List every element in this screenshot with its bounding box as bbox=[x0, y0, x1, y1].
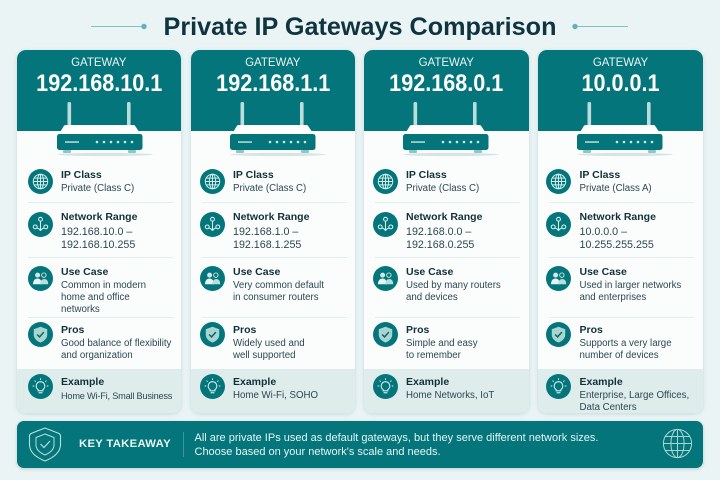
use case text bbox=[580, 280, 681, 303]
header: gateway 192.168.0.1: 192.168.0.1 bbox=[389, 70, 503, 97]
network range heading: Network Range bbox=[406, 210, 482, 222]
IP class value: Private (Class C) bbox=[61, 182, 134, 194]
network range value bbox=[233, 226, 301, 251]
network range value bbox=[580, 226, 654, 251]
pros text: and organization bbox=[61, 350, 133, 361]
icon: shield bbox=[28, 322, 53, 347]
header: gateway 192.168.0.1: GATEWAY bbox=[419, 57, 474, 69]
pros text: Supports a very large bbox=[580, 338, 672, 349]
icon: users bbox=[546, 266, 571, 291]
header: gateway 192.168.1.1: GATEWAY bbox=[245, 57, 300, 69]
icon: users bbox=[373, 266, 398, 291]
router icon bbox=[230, 102, 326, 156]
network range value: 192.168.10.0 – bbox=[61, 226, 132, 238]
IP class value: Private (Class C) bbox=[233, 182, 306, 194]
pros heading: Pros bbox=[233, 324, 256, 336]
example heading: Example bbox=[61, 376, 104, 388]
network range value: 10.255.255.255 bbox=[580, 239, 654, 251]
example band bbox=[190, 369, 355, 413]
example text: Home Networks, IoT bbox=[406, 390, 494, 401]
pros text: Widely used and bbox=[233, 338, 305, 349]
example heading: Example bbox=[406, 376, 449, 388]
pros heading: Pros bbox=[61, 324, 84, 336]
pros text: to remember bbox=[406, 350, 461, 361]
use case text bbox=[61, 280, 146, 315]
example band bbox=[16, 369, 181, 413]
use case text: home and office bbox=[61, 292, 130, 303]
takeaway text: All are private IPs used as default gateways, but they serve different network sizes. bbox=[194, 432, 598, 444]
pros text: number of devices bbox=[580, 350, 659, 361]
example text: Enterprise, Large Offices, bbox=[580, 390, 689, 401]
use case text: Used in larger networks bbox=[580, 280, 681, 290]
icon: network bbox=[546, 212, 571, 237]
use case heading: Use Case bbox=[406, 266, 453, 278]
router icon bbox=[57, 102, 152, 156]
use case text: Very common default bbox=[233, 280, 324, 290]
pros text: well supported bbox=[233, 350, 295, 361]
divider bbox=[182, 432, 184, 457]
panel: gateway 192.168.10.1 bbox=[16, 50, 181, 413]
IP class heading: IP Class bbox=[406, 169, 447, 181]
pros heading: Pros bbox=[580, 324, 603, 336]
panel: gateway 192.168.0.1 bbox=[364, 50, 528, 413]
icon: shield outline bbox=[28, 427, 62, 462]
takeaway text: Choose based on your network's scale and needs. bbox=[194, 446, 441, 458]
icon: network bbox=[200, 212, 225, 237]
icon: shield bbox=[373, 322, 398, 347]
example text: Home Wi-Fi, SOHO bbox=[233, 390, 318, 401]
icon: bulb bbox=[200, 374, 225, 399]
icon: globe outline bbox=[662, 428, 692, 459]
pros text: Simple and easy bbox=[406, 338, 478, 349]
use case heading: Use Case bbox=[580, 266, 627, 278]
pros text bbox=[233, 338, 305, 361]
use case text: in consumer routers bbox=[233, 292, 319, 303]
use case text: Common in modern bbox=[61, 280, 146, 290]
left title ornament bbox=[91, 24, 147, 30]
panel: key takeaway bbox=[16, 421, 703, 468]
title: Private IP Gateways Comparison bbox=[164, 13, 556, 41]
key takeaway label: KEY TAKEAWAY bbox=[79, 438, 171, 450]
use case text: Used by many routers bbox=[406, 280, 501, 290]
use case text: networks bbox=[61, 304, 100, 315]
header: gateway 10.0.0.1: 10.0.0.1 bbox=[581, 70, 660, 97]
network range value bbox=[61, 226, 135, 251]
takeaway text bbox=[194, 430, 598, 460]
use case heading: Use Case bbox=[61, 266, 108, 278]
header: gateway 192.168.1.1 bbox=[190, 50, 355, 131]
network range value: 192.168.1.0 – bbox=[233, 226, 298, 238]
IP class value: Private (Class C) bbox=[406, 182, 479, 194]
icon: bulb bbox=[373, 374, 398, 399]
use case text: and devices bbox=[406, 292, 458, 303]
pros text: Good balance of flexibility bbox=[61, 338, 171, 349]
use case text bbox=[233, 280, 324, 303]
icon: globe bbox=[373, 169, 398, 194]
IP class heading: IP Class bbox=[580, 169, 620, 181]
example text: Home Wi-Fi, Small Business bbox=[61, 391, 172, 401]
icon: users bbox=[28, 266, 53, 291]
network range value: 192.168.10.255 bbox=[61, 239, 135, 251]
pros text bbox=[580, 338, 672, 361]
router icon bbox=[577, 102, 672, 156]
header: gateway 192.168.10.1: 192.168.10.1 bbox=[36, 70, 162, 97]
network range value: 192.168.1.255 bbox=[233, 239, 301, 251]
header: gateway 192.168.10.1 bbox=[16, 50, 181, 131]
pros text bbox=[406, 338, 478, 361]
header: gateway 10.0.0.1: GATEWAY bbox=[593, 57, 648, 69]
icon: bulb bbox=[546, 374, 571, 399]
header: gateway 192.168.1.1: 192.168.1.1 bbox=[216, 70, 330, 97]
panel: gateway 192.168.1.1 bbox=[190, 50, 355, 413]
pros heading: Pros bbox=[406, 324, 429, 336]
network range value: 10.0.0.0 – bbox=[580, 226, 627, 238]
IP class value: Private (Class A) bbox=[580, 182, 652, 194]
icon: shield bbox=[546, 322, 571, 347]
header: gateway 10.0.0.1 bbox=[538, 50, 703, 131]
network range value: 192.168.0.255 bbox=[406, 239, 474, 251]
example band bbox=[538, 369, 703, 413]
icon: users bbox=[200, 266, 225, 291]
icon: globe bbox=[200, 169, 225, 194]
network range value: 192.168.0.0 – bbox=[406, 226, 471, 238]
IP class heading: IP Class bbox=[61, 169, 102, 181]
right title ornament bbox=[572, 24, 628, 30]
use case heading: Use Case bbox=[233, 266, 280, 278]
header: gateway 192.168.0.1 bbox=[364, 50, 528, 131]
use case text bbox=[406, 280, 501, 303]
network range heading: Network Range bbox=[61, 210, 137, 222]
example text bbox=[580, 390, 689, 413]
icon: globe bbox=[28, 169, 53, 194]
icon: network bbox=[28, 212, 53, 237]
example heading: Example bbox=[233, 376, 276, 388]
network range value bbox=[406, 226, 474, 251]
icon: network bbox=[373, 212, 398, 237]
network range heading: Network Range bbox=[580, 210, 656, 222]
example heading: Example bbox=[580, 376, 623, 388]
icon: bulb bbox=[28, 374, 53, 399]
icon: shield bbox=[200, 322, 225, 347]
example band bbox=[364, 369, 528, 413]
panel: gateway 10.0.0.1 bbox=[538, 50, 703, 413]
pros text bbox=[61, 338, 172, 361]
use case text: and enterprises bbox=[580, 292, 646, 303]
router icon bbox=[403, 102, 498, 156]
icon: globe bbox=[546, 169, 571, 194]
header: gateway 192.168.10.1: GATEWAY bbox=[71, 57, 126, 69]
IP class heading: IP Class bbox=[233, 169, 274, 181]
network range heading: Network Range bbox=[233, 210, 309, 222]
